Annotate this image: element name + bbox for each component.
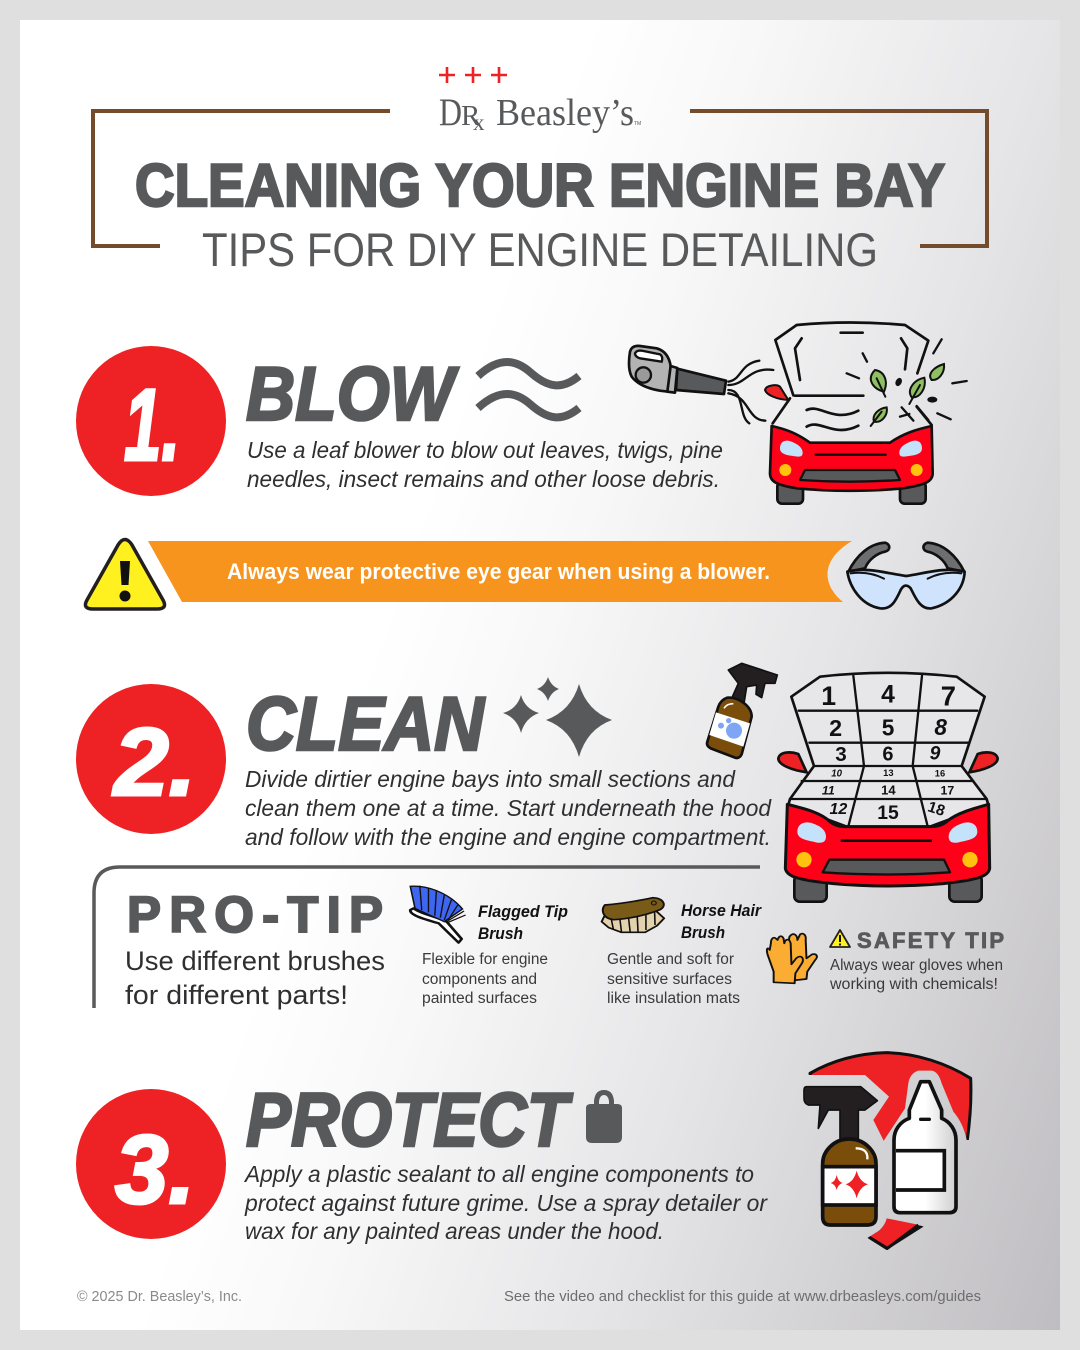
- hood section numbers: 9: [930, 744, 941, 765]
- icon: gloves: [767, 934, 817, 983]
- step 3: protect: [76, 1053, 982, 1248]
- spray bottle: [707, 663, 777, 758]
- horse hair text: sensitive surfaces: [607, 971, 732, 988]
- illustration: shield and products: [787, 1053, 982, 1248]
- leaves and debris: [847, 339, 967, 426]
- air streams: [728, 361, 773, 423]
- icon: padlock: [586, 1090, 622, 1143]
- footer link: See the video and checklist for this guide at www.drbeasleys.com/guides: [504, 1289, 981, 1305]
- logo: Dr Beasley's: TM: [634, 121, 641, 127]
- orange ribbon: [148, 541, 852, 602]
- hood section numbers: 12: [829, 801, 847, 818]
- cut-out halos: [787, 1075, 890, 1243]
- horse hair title: Brush: [681, 923, 725, 942]
- safety tip text: working with chemicals!: [829, 976, 998, 993]
- hood section numbers: 16: [935, 768, 945, 778]
- hood section numbers: 4: [881, 682, 895, 709]
- icon: wind waves: [478, 362, 579, 417]
- icon: warning triangle: [85, 540, 165, 609]
- pro-tip text: [125, 946, 385, 1010]
- number badge 1: [76, 346, 226, 496]
- logo: Dr Beasley's: R: [461, 100, 481, 132]
- illustration: spray bottle and numbered car: [707, 663, 998, 902]
- pro-tip text: Use different brushes: [125, 946, 385, 976]
- horse hair text: Gentle and soft for: [607, 951, 734, 968]
- mirrors: [778, 752, 807, 772]
- step 2: clean: [76, 663, 998, 902]
- hood section numbers: 8: [934, 714, 947, 740]
- heading: protect: PROTECT: [246, 1078, 573, 1163]
- hood section numbers: 11: [822, 783, 835, 797]
- hood section numbers: 1: [821, 681, 836, 711]
- number badge 2: 2.: [112, 709, 196, 816]
- logo: Dr Beasley's: Beasley’s: [496, 92, 634, 134]
- horse hair text: like insulation mats: [607, 990, 740, 1007]
- logo: Dr Beasley's: x: [473, 110, 485, 135]
- grille: [800, 470, 900, 482]
- mirror: [765, 385, 788, 400]
- number badge 3: [76, 1089, 226, 1239]
- icon: small warning triangle: [830, 930, 850, 947]
- hood and body outline: [773, 322, 932, 430]
- blow description: Use a leaf blower to blow out leaves, twigs, pine: [247, 437, 723, 463]
- title frame: [93, 111, 987, 246]
- footer copyright: © 2025 Dr. Beasley’s, Inc.: [77, 1289, 242, 1305]
- tyres: [794, 875, 982, 902]
- protect description: [243, 1161, 768, 1244]
- logo: Dr Beasley's: D: [439, 91, 462, 134]
- icon: safety goggles: [847, 543, 965, 609]
- hood section numbers: 15: [877, 803, 899, 824]
- logo: Dr Beasley's: [439, 67, 641, 135]
- hood section numbers: 17: [940, 783, 954, 797]
- shield: [810, 1053, 971, 1248]
- number badge 3: 3.: [115, 1115, 195, 1224]
- flagged tip title: [478, 902, 568, 943]
- blow description: needles, insect remains and other loose debris.: [247, 466, 720, 492]
- headlights: [780, 441, 803, 457]
- flagged tip title: Brush: [478, 924, 523, 943]
- pro-tip text: for different parts!: [125, 980, 348, 1010]
- title: CLEANING YOUR ENGINE BAY: [135, 152, 945, 219]
- flagged tip text: Flexible for engine: [422, 951, 548, 968]
- hood section numbers: 3: [835, 743, 847, 766]
- horse hair text: [607, 951, 740, 1007]
- warning banner: [85, 540, 965, 609]
- car body: [770, 426, 933, 491]
- protect description: protect against future grime. Use a spray detailer or: [244, 1190, 768, 1216]
- hood section numbers: [821, 681, 956, 824]
- clean description: clean them one at a time. Start underneath the hood: [245, 795, 772, 821]
- hood section numbers: 14: [881, 782, 896, 797]
- car body: [785, 804, 990, 886]
- safety tip text: Always wear gloves when: [830, 957, 1003, 974]
- flagged tip text: [422, 951, 548, 1007]
- hood section numbers: 6: [882, 743, 894, 765]
- pro-tip heading: PRO-TIP: [127, 886, 383, 943]
- hood section numbers: 5: [882, 714, 894, 740]
- horse hair title: Horse Hair: [681, 901, 762, 920]
- banner text: Always wear protective eye gear when using a blower.: [227, 559, 770, 584]
- flagged tip text: painted surfaces: [422, 990, 537, 1007]
- sealant bottle: [894, 1082, 956, 1213]
- hood section numbers: 7: [941, 681, 956, 712]
- hood grid: [790, 676, 987, 825]
- flagged tip title: Flagged Tip: [478, 902, 568, 921]
- clean description: Divide dirtier engine bays into small sections and: [245, 766, 736, 792]
- hood section numbers: 2: [829, 715, 842, 741]
- protect description: wax for any painted areas under the hood.: [245, 1218, 664, 1244]
- horse hair brush: [602, 898, 762, 1007]
- clean description: [245, 766, 772, 850]
- headlights: [797, 822, 826, 843]
- flagged tip brush: [410, 886, 568, 1007]
- step 1: blow: [76, 322, 967, 504]
- number badge 2: [76, 684, 226, 834]
- pro-tip section: [94, 867, 762, 1010]
- grille: [823, 860, 950, 874]
- safety tip: [767, 928, 1004, 993]
- subtitle: TIPS FOR DIY ENGINE DETAILING: [202, 223, 878, 276]
- blow description: [247, 437, 723, 492]
- clean description: and follow with the engine and engine compartment.: [245, 824, 771, 850]
- hood: [788, 673, 988, 827]
- horse hair title: [681, 901, 762, 942]
- icon: sparkles: [503, 677, 612, 757]
- heading: clean: CLEAN: [246, 682, 486, 767]
- icon: flagged tip brush: [410, 886, 466, 943]
- protect description: Apply a plastic sealant to all engine components to: [243, 1161, 754, 1187]
- hood section numbers: 13: [883, 768, 894, 778]
- safety tip heading: SAFETY TIP: [857, 928, 1004, 953]
- illustration: leaf blower and car: [629, 322, 967, 504]
- tyres: [777, 482, 926, 504]
- hood section numbers: 18: [926, 798, 947, 820]
- icon: horse hair brush: [602, 898, 664, 932]
- heading: blow: BLOW: [246, 352, 460, 437]
- number badge 1: 1.: [124, 368, 180, 482]
- flagged tip text: components and: [422, 971, 537, 988]
- leaf blower: [629, 346, 726, 394]
- spray bottle: [804, 1087, 877, 1225]
- shield tip: [870, 1218, 917, 1248]
- safety tip text: [829, 957, 1003, 993]
- hood section numbers: 10: [831, 768, 843, 779]
